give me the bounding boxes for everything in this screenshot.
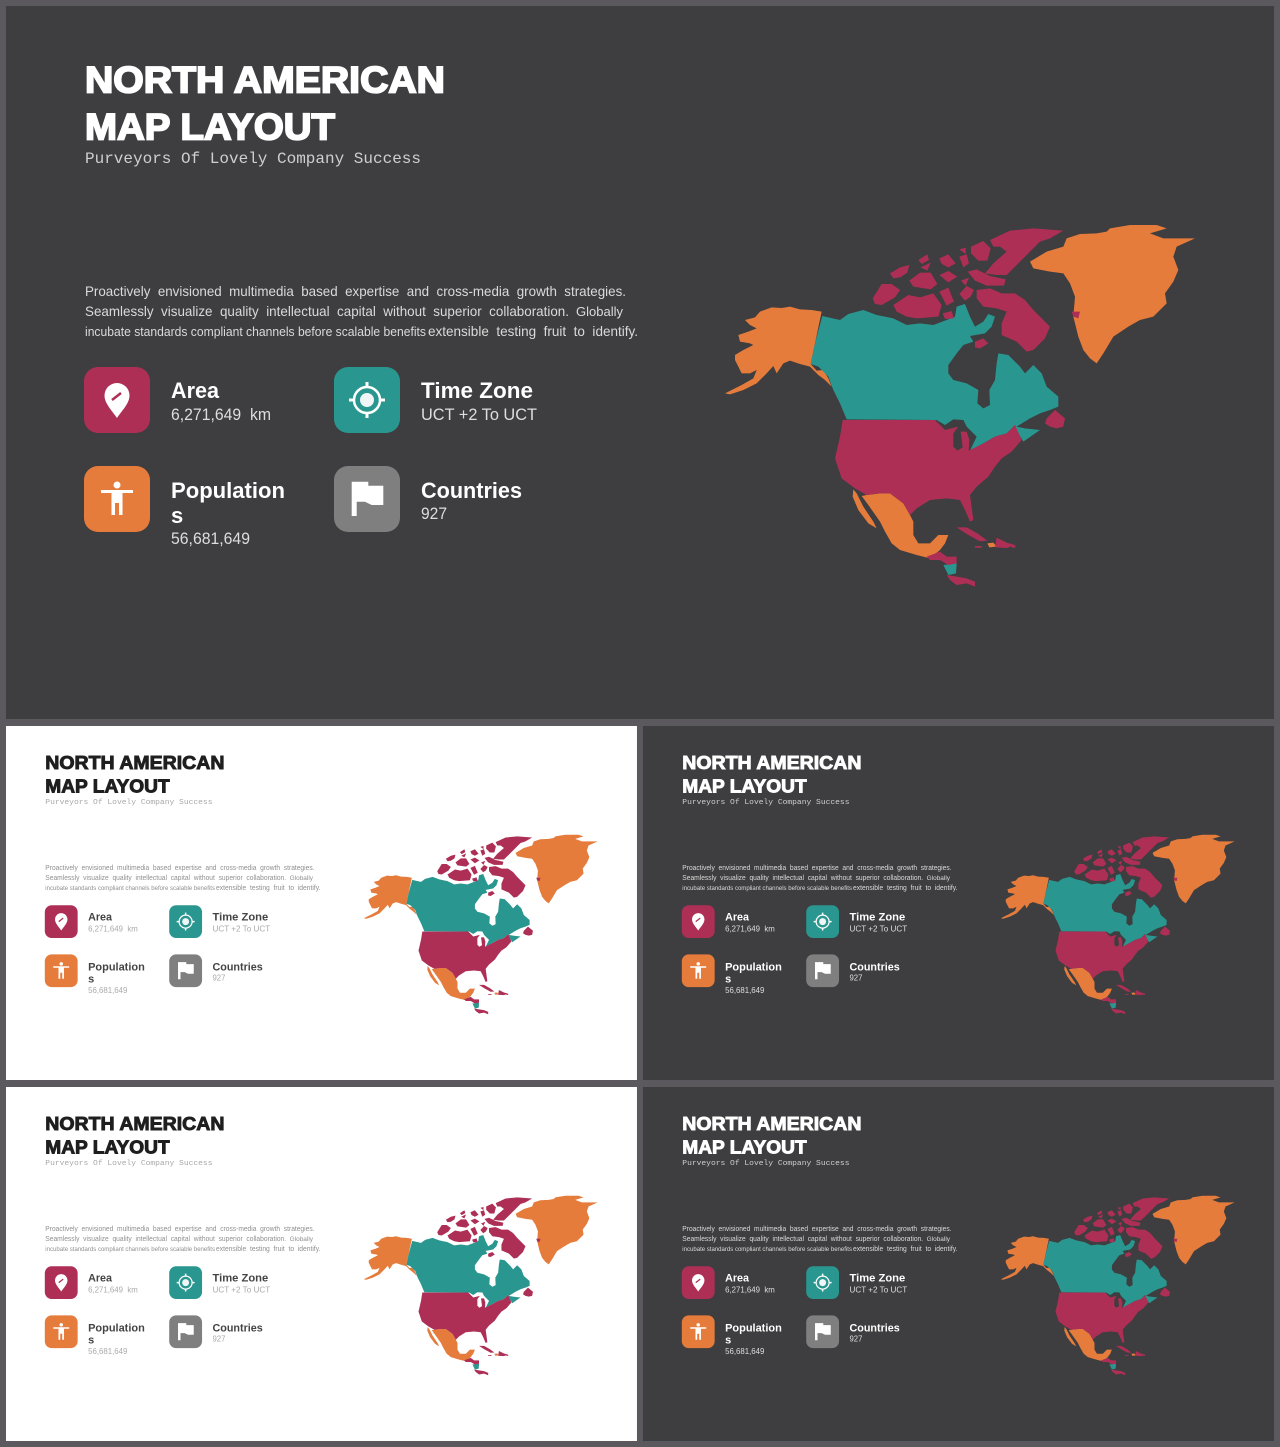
subtitle: Purveyors Of Lovely Company Success [45,1160,213,1168]
stat: populations [45,954,145,995]
title: NORTH AMERICAN [682,1113,861,1134]
title: NORTH AMERICAN [682,752,861,773]
stat: countries: 927 [421,504,447,523]
stat: populations: 56,681,649 [171,529,250,548]
stat: populations: Population [171,478,285,503]
title: MAP LAYOUT [682,775,807,796]
body text: Globally [290,1236,314,1243]
stat: time zone [169,905,270,938]
stat: time zone: Time Zone [212,912,268,924]
title: NORTH AMERICAN [45,752,224,773]
title [45,752,224,796]
title: MAP LAYOUT [45,1136,170,1157]
stat: time zone: Time Zone [849,1273,905,1285]
stat: countries: Countries [849,961,900,973]
stat: populations: s [88,974,94,986]
stat: area [682,905,775,938]
title: NORTH AMERICAN [45,1113,224,1134]
stat: populations: 56,681,649 [88,1346,128,1356]
stat: time zone: UCT +2 To UCT [421,405,537,424]
subtitle: Purveyors Of Lovely Company Success [682,1160,850,1168]
stat: area: Area [171,378,220,403]
stat: area: 6,271,649 km [171,405,271,424]
stat: countries [806,954,900,987]
body text: Globally [927,1236,951,1243]
stat: countries: 927 [212,973,226,983]
panel: main dark slide [6,6,1274,719]
stat: countries: Countries [421,478,522,503]
subtitle: Purveyors Of Lovely Company Success [85,150,421,168]
body text: incubate standards compliant channels before scalable benefits [45,1246,215,1253]
title: MAP LAYOUT [85,106,335,148]
stat: area: Area [88,1273,113,1285]
title [682,752,861,796]
stat: populations: Population [88,1322,145,1334]
body text: Globally [290,875,314,882]
stat: area [682,1266,775,1299]
stat: time zone: UCT +2 To UCT [849,924,907,934]
body text: Proactively envisioned multimedia based expertise and cross-media growth strategies. [85,283,626,299]
stat: time zone: Time Zone [212,1273,268,1285]
body text: extensible testing fruit to identify. [428,323,638,339]
panel: dark slide top right [643,726,1274,1080]
stat: populations: s [88,1335,94,1347]
stat: area: Area [88,912,113,924]
stat: time zone [334,367,537,433]
title: MAP LAYOUT [45,775,170,796]
stat: time zone: UCT +2 To UCT [212,1285,270,1295]
stat: area: 6,271,649 km [725,924,775,934]
stat: populations [84,466,285,548]
body text: Proactively envisioned multimedia based expertise and cross-media growth strategies. [45,865,315,872]
map: North America [364,835,598,1014]
stat: countries: 927 [849,1334,863,1344]
subtitle: Purveyors Of Lovely Company Success [45,799,213,807]
stat: populations: Population [88,961,145,973]
stat: time zone [806,1266,907,1299]
body text: Globally [576,305,624,319]
stat: time zone: Time Zone [849,912,905,924]
stat: countries [169,954,263,987]
stat: populations: 56,681,649 [725,985,765,995]
body text: incubate standards compliant channels before scalable benefits [85,325,426,339]
body text: extensible testing fruit to identify. [216,1246,321,1253]
body text: Seamlessly visualize quality intellectual capital without superior collaboration. [45,1236,286,1243]
stat: populations [682,1315,782,1356]
stat: area [45,1266,138,1299]
stat: populations: 56,681,649 [88,985,128,995]
stat: populations [682,954,782,995]
stat: area: Area [725,912,750,924]
body text [45,865,321,892]
stat: populations: Population [725,1322,782,1334]
stat: populations: s [171,503,183,528]
body text: incubate standards compliant channels before scalable benefits [45,885,215,892]
stat: countries: Countries [212,961,263,973]
body text: Proactively envisioned multimedia based expertise and cross-media growth strategies. [682,865,952,872]
stat: populations: Population [725,961,782,973]
stat: time zone: UCT +2 To UCT [212,924,270,934]
stat: time zone: UCT +2 To UCT [849,1285,907,1295]
map: North America [1001,1196,1235,1375]
stat: time zone [169,1266,270,1299]
stat: area [84,367,271,433]
stat: countries: 927 [212,1334,226,1344]
panel: dark slide bottom right [643,1087,1274,1441]
title: MAP LAYOUT [682,1136,807,1157]
body text: Seamlessly visualize quality intellectual capital without superior collaboration. [682,875,923,882]
stat: area: 6,271,649 km [725,1285,775,1295]
title: NORTH AMERICAN [85,60,445,100]
stat: populations: s [725,974,731,986]
body text: Proactively envisioned multimedia based expertise and cross-media growth strategies. [45,1226,315,1233]
stat: area: 6,271,649 km [88,1285,138,1295]
body text: Seamlessly visualize quality intellectual capital without superior collaboration. [682,1236,923,1243]
stat: countries: Countries [212,1322,263,1334]
body text: Seamlessly visualize quality intellectual capital without superior collaboration. [85,303,569,319]
panel: light slide bottom left [6,1087,637,1441]
body text: incubate standards compliant channels before scalable benefits [682,885,852,892]
body text: Globally [927,875,951,882]
body text [45,1226,321,1253]
map: North America [725,225,1195,587]
panel: light slide top left [6,726,637,1080]
stat: area: 6,271,649 km [88,924,138,934]
body text [682,865,958,892]
stat: countries [169,1315,263,1348]
body text: Proactively envisioned multimedia based expertise and cross-media growth strategies. [682,1226,952,1233]
stat: populations: 56,681,649 [725,1346,765,1356]
stat: countries: Countries [849,1322,900,1334]
stat: populations: s [725,1335,731,1347]
body text: incubate standards compliant channels before scalable benefits [682,1246,852,1253]
stat: countries [806,1315,900,1348]
stat: countries [334,466,522,532]
body text: extensible testing fruit to identify. [853,1246,958,1253]
title [85,60,445,148]
title [45,1113,224,1157]
stat: time zone [806,905,907,938]
body text: extensible testing fruit to identify. [853,885,958,892]
stat: time zone: Time Zone [421,378,533,403]
stat: countries: 927 [849,973,863,983]
stat: area: Area [725,1273,750,1285]
stat: area [45,905,138,938]
body text [682,1226,958,1253]
title [682,1113,861,1157]
body text: extensible testing fruit to identify. [216,885,321,892]
body text: Seamlessly visualize quality intellectual capital without superior collaboration. [45,875,286,882]
map: North America [364,1196,598,1375]
body text [85,283,638,339]
map: North America [1001,835,1235,1014]
stat: populations [45,1315,145,1356]
subtitle: Purveyors Of Lovely Company Success [682,799,850,807]
